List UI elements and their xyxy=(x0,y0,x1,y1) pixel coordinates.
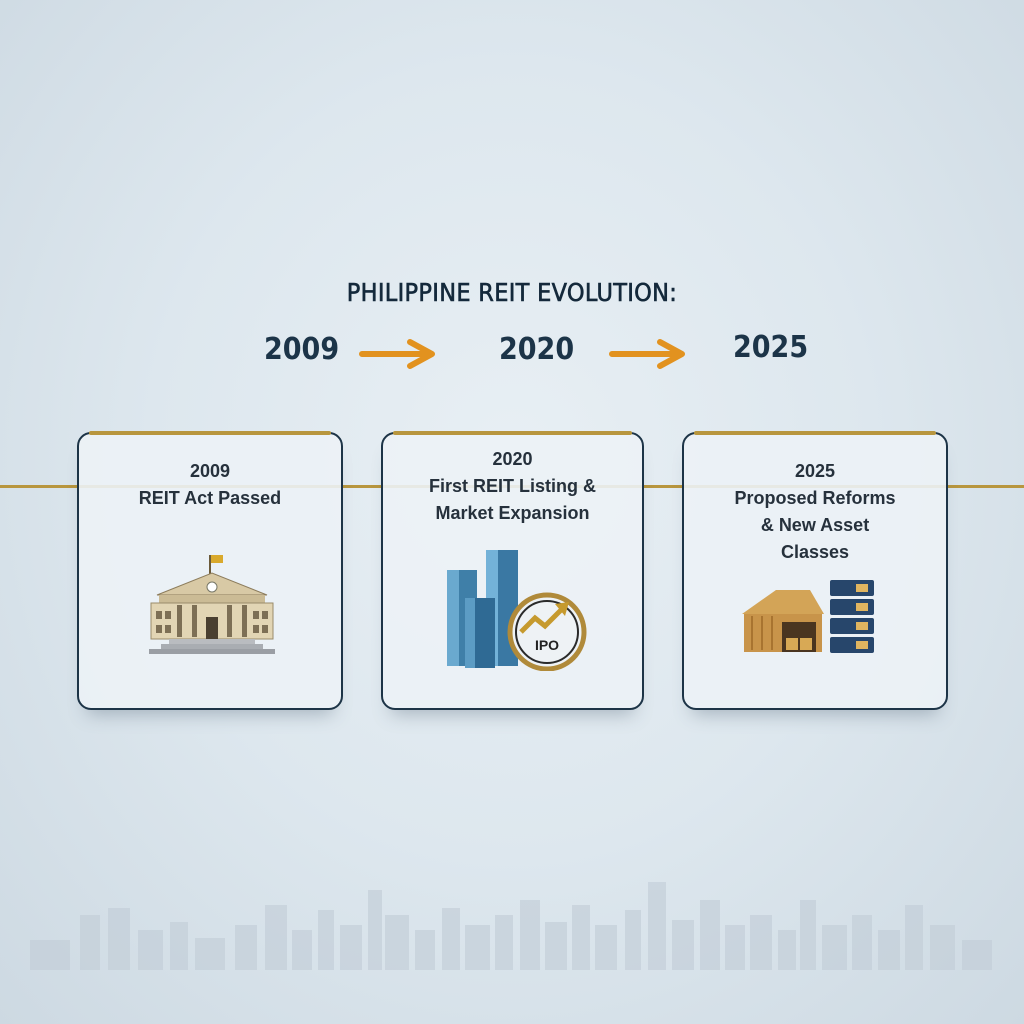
card 1 text xyxy=(139,461,281,508)
card 3 text: & New Asset xyxy=(761,515,869,535)
card 2 text: Market Expansion xyxy=(435,503,590,523)
arrow 1 xyxy=(359,339,435,369)
card 1 text: REIT Act Passed xyxy=(139,488,281,508)
icon: skyscrapers with IPO xyxy=(447,550,586,671)
card 3 xyxy=(682,432,948,710)
card 3 text xyxy=(734,461,896,562)
card 3 text: Classes xyxy=(781,542,849,562)
arrow 2 xyxy=(609,339,685,369)
timeline line xyxy=(0,485,1024,488)
card 3 text: 2025 xyxy=(795,461,835,481)
year row xyxy=(264,330,808,369)
icon: warehouse and server xyxy=(742,580,874,653)
card 2 text: 2020 xyxy=(492,449,533,469)
skyline xyxy=(30,882,992,970)
year 2009: 2009 xyxy=(264,332,339,367)
card 2 text xyxy=(429,449,596,523)
card 3 text: Proposed Reforms xyxy=(734,488,896,508)
icon: skyscrapers with IPO: IPO xyxy=(535,637,559,653)
card 2 text: First REIT Listing & xyxy=(429,476,596,496)
card 2 xyxy=(381,432,644,710)
icon: government building xyxy=(149,555,275,654)
year 2020: 2020 xyxy=(499,332,574,367)
year 2025: 2025 xyxy=(733,330,808,365)
title: PHILIPPINE REIT EVOLUTION: xyxy=(347,278,677,307)
card 1 xyxy=(77,432,343,710)
card 1 text: 2009 xyxy=(190,461,230,481)
